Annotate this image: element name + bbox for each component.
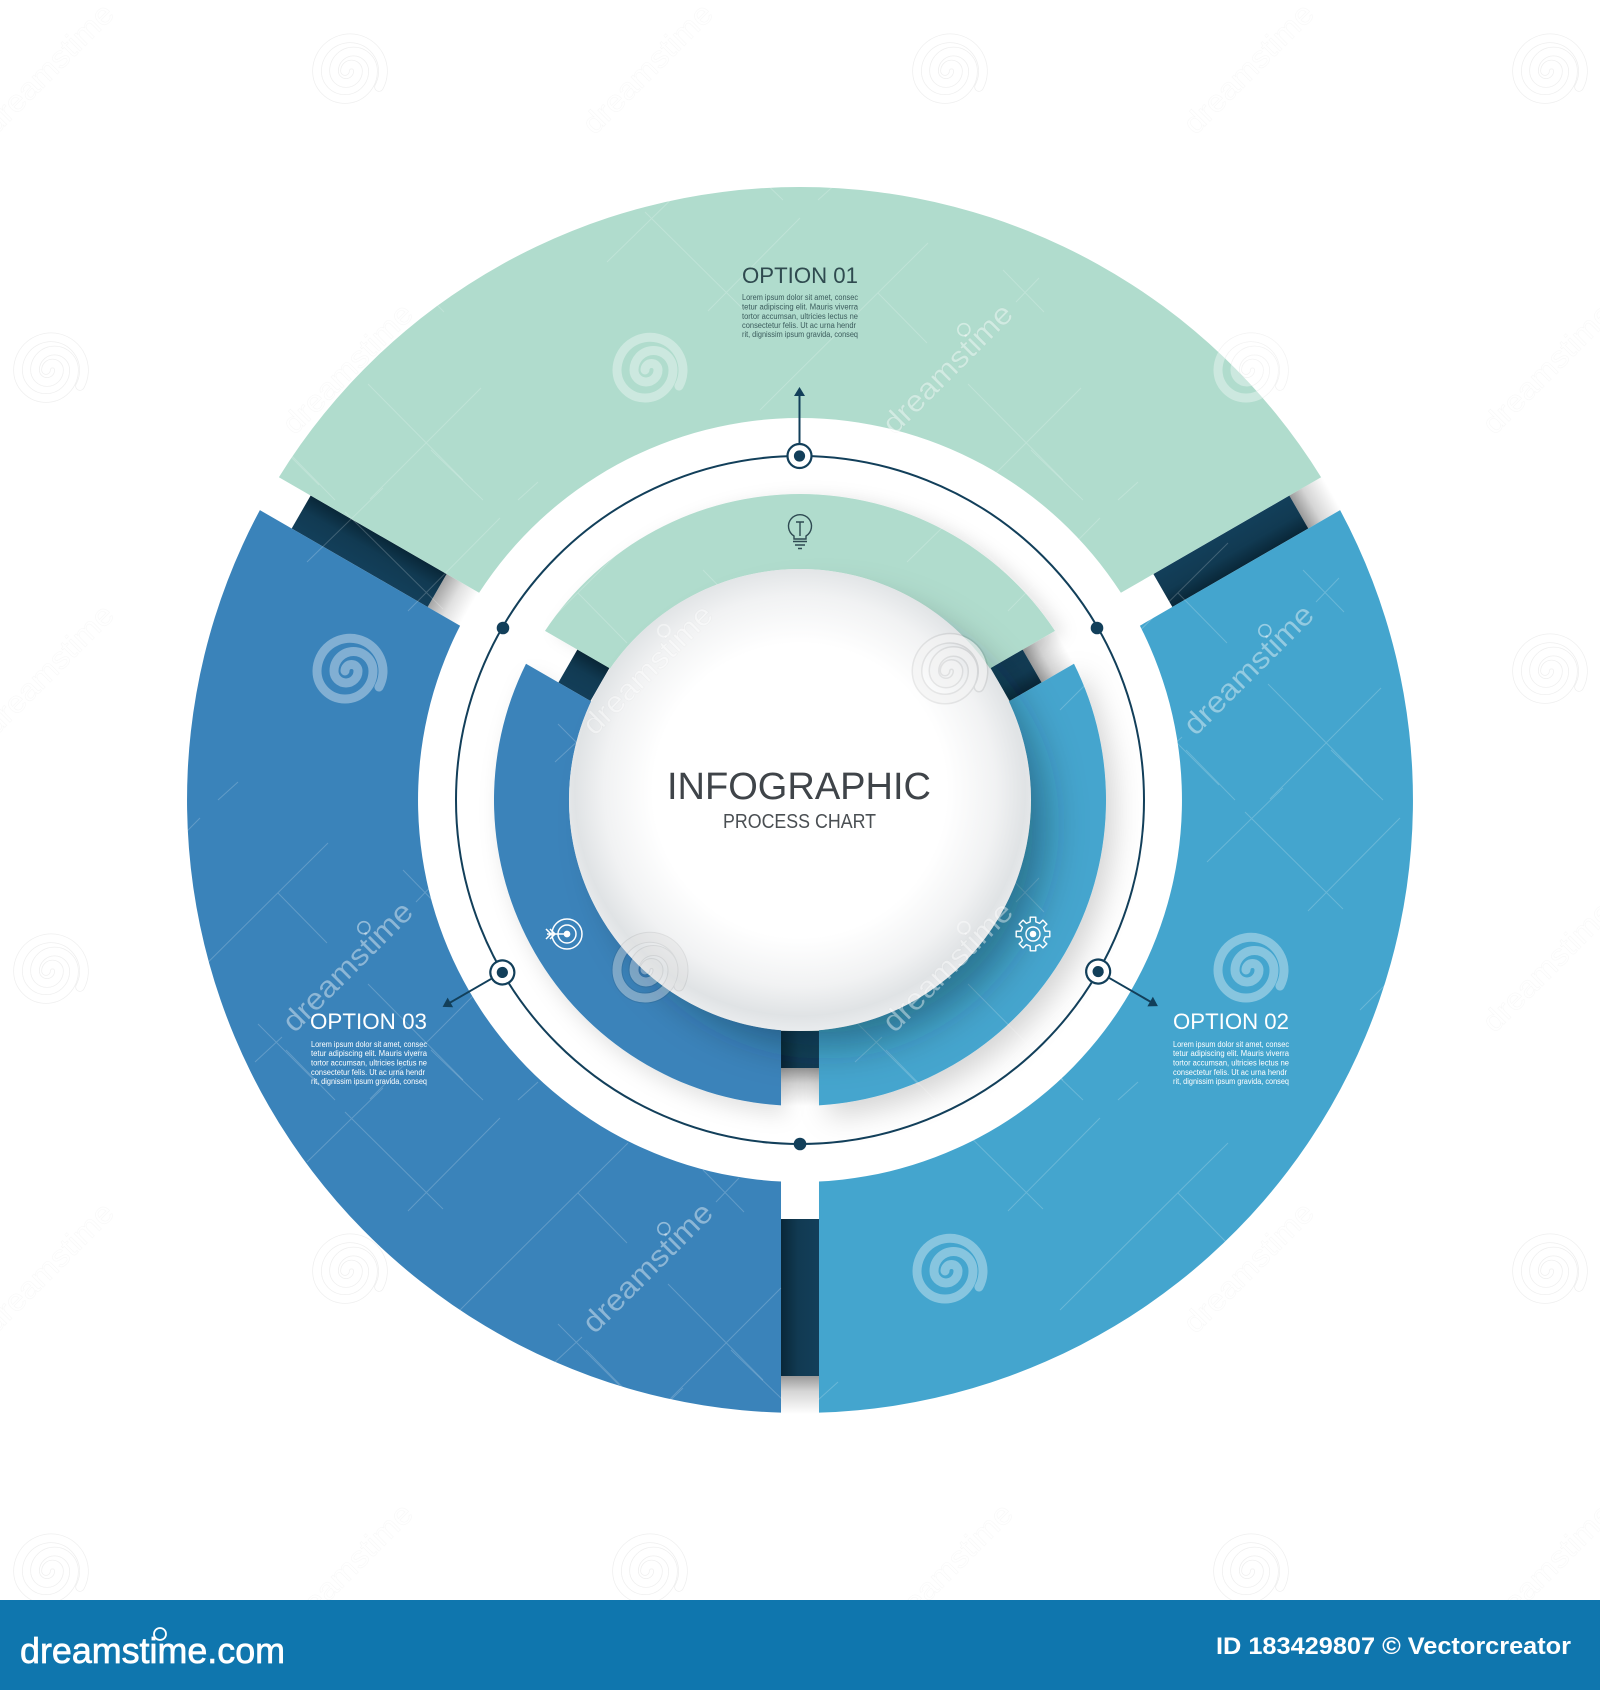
watermark text: dreamstime bbox=[276, 895, 420, 1039]
text block: option 03: Lorem ipsum dolor sit amet, consec bbox=[311, 1040, 427, 1049]
ring dot: upper left bbox=[497, 622, 509, 634]
text block: option 02: consectetur felis. Ut ac urna hendr bbox=[1173, 1068, 1287, 1077]
watermark text: dreamstime bbox=[1177, 1196, 1321, 1340]
watermark text: dreamstime bbox=[876, 895, 1020, 1039]
title: INFOGRAPHIC bbox=[667, 766, 931, 808]
connector ring bbox=[456, 456, 1144, 1144]
watermark spirals on coloured areas bbox=[317, 337, 1284, 1299]
subtitle: PROCESS CHART bbox=[723, 811, 876, 833]
watermark text: dreamstime bbox=[576, 598, 720, 742]
gap shadows and dark connector bars bbox=[292, 477, 1341, 1414]
text block: option 01: OPTION 01 bbox=[742, 263, 858, 288]
text block: option 01: tortor accumsan, ultricies lectus ne bbox=[742, 312, 858, 321]
arrow and node: option 01 bbox=[788, 387, 812, 468]
watermark text: dreamstime bbox=[276, 297, 420, 441]
text block: option 03: tetur adipiscing elit. Mauris viverra bbox=[311, 1049, 428, 1058]
text block: option 02: tortor accumsan, ultricies lectus ne bbox=[1173, 1058, 1289, 1068]
watermark text: dreamstime bbox=[576, 1196, 720, 1340]
text block: option 03: OPTION 03 bbox=[310, 1009, 427, 1034]
arrow and node: option 02 bbox=[1082, 955, 1164, 1016]
watermark text: dreamstime bbox=[276, 1497, 420, 1641]
watermark text: dreamstime bbox=[576, 0, 720, 141]
text block: option 02: tetur adipiscing elit. Mauris viverra bbox=[1173, 1049, 1290, 1058]
text block: option 01 bbox=[742, 263, 859, 339]
text block: option 01: Lorem ipsum dolor sit amet, consec bbox=[742, 293, 858, 302]
icon: gear bbox=[1016, 917, 1050, 951]
watermark text: dreamstime bbox=[1177, 598, 1321, 742]
text block: option 02: OPTION 02 bbox=[1173, 1009, 1289, 1034]
footer credit: ID 183429807 © Vectorcreator bbox=[1216, 1633, 1571, 1660]
footer bar bbox=[0, 1600, 1600, 1690]
watermark text: dreamstime bbox=[876, 1497, 1020, 1641]
text block: option 01: rit, dignissim ipsum gravida, conseq bbox=[742, 330, 858, 339]
text block: option 02: Lorem ipsum dolor sit amet, consec bbox=[1173, 1040, 1289, 1049]
outer segment: option 01 bbox=[279, 187, 1321, 593]
icon: light bulb bbox=[788, 515, 811, 548]
text block: option 02 bbox=[1173, 1009, 1290, 1086]
text block: option 01: tetur adipiscing elit. Mauris viverra bbox=[742, 302, 859, 312]
outer segment: option 02 bbox=[719, 452, 1591, 1558]
text block: option 01: consectetur felis. Ut ac urna hendr bbox=[742, 321, 856, 330]
text block: option 03: rit, dignissim ipsum gravida, conseq bbox=[311, 1077, 427, 1086]
watermark text: dreamstime bbox=[876, 297, 1020, 441]
inner ring segments bbox=[407, 494, 1193, 1174]
ring dot: upper right bbox=[1091, 622, 1103, 634]
text block: option 03: consectetur felis. Ut ac urna hendr bbox=[311, 1068, 425, 1077]
icon: target bbox=[546, 919, 582, 949]
text block: option 03: tortor accumsan, ultricies lectus ne bbox=[311, 1058, 427, 1068]
arrow and node: option 03 bbox=[437, 956, 519, 1017]
outer segment: option 03 bbox=[9, 452, 881, 1558]
text block: option 03 bbox=[310, 1009, 428, 1086]
text block: option 02: rit, dignissim ipsum gravida, conseq bbox=[1173, 1077, 1289, 1086]
center circle shadow bbox=[602, 602, 1046, 1046]
watermark text: dreamstime bbox=[1177, 0, 1321, 141]
ring dot: bottom bbox=[794, 1138, 806, 1150]
footer logo: dreamstime.com bbox=[20, 1630, 285, 1671]
center circle bbox=[569, 569, 1031, 1031]
